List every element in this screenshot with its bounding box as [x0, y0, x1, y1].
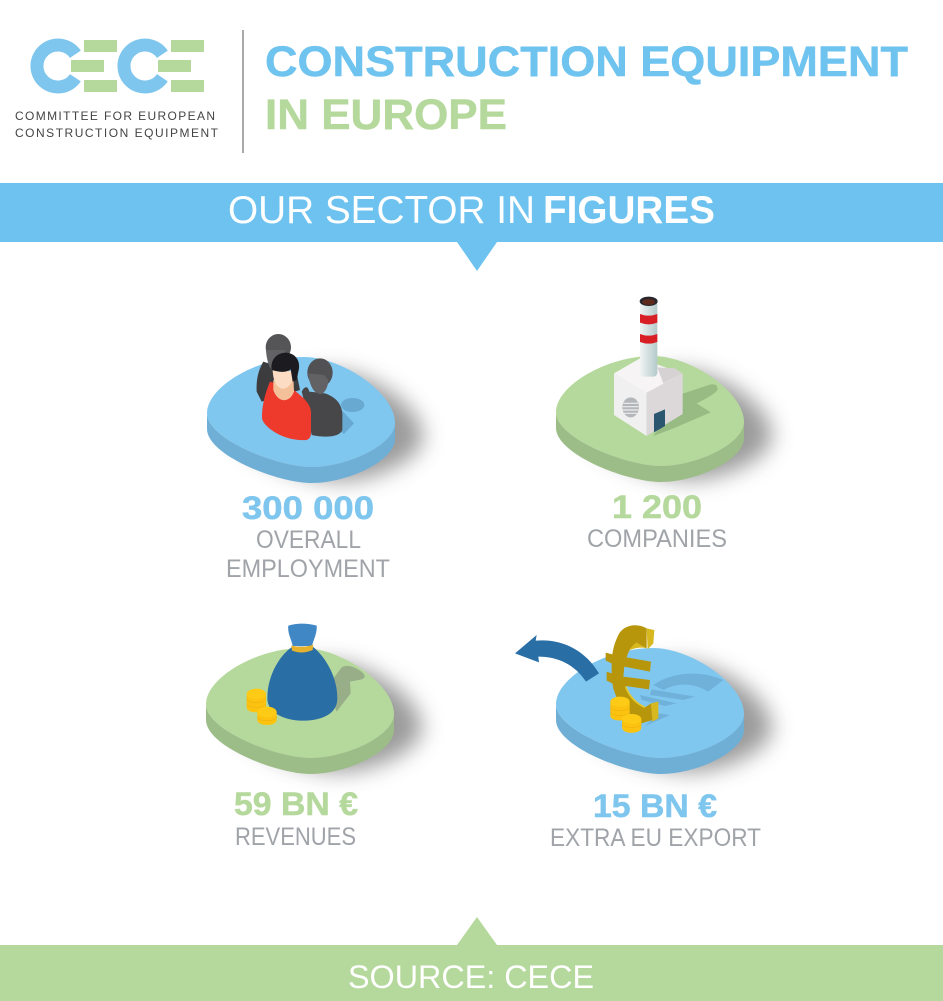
- title: IN EUROPE: [265, 91, 507, 139]
- panel: extra EU export: [515, 625, 772, 852]
- label: overall employment: OVERALL: [256, 526, 361, 554]
- label: companies: COMPANIES: [587, 525, 727, 553]
- footer: source: [0, 917, 943, 1001]
- platform: [206, 648, 422, 774]
- banner: our sector in figures: [0, 183, 943, 271]
- stat: 15 BN €: 15 BN €: [593, 788, 717, 824]
- label: overall employment: EMPLOYMENT: [226, 555, 390, 583]
- platform: [556, 356, 772, 482]
- header: CECE logo: [15, 40, 219, 140]
- icon: export arrow: [515, 635, 599, 682]
- label: extra EU export: EXTRA EU EXPORT: [550, 824, 761, 852]
- icon: factory: [614, 297, 718, 436]
- stat: 59 BN €: 59 BN €: [234, 786, 358, 822]
- icon: people: [257, 334, 364, 440]
- label: revenues: REVENUES: [235, 823, 356, 851]
- platform: [556, 648, 772, 774]
- title: [265, 38, 908, 139]
- stat: 1 200: 1 200: [612, 489, 702, 525]
- logo mark: [37, 40, 204, 92]
- panel: revenues: [206, 624, 422, 851]
- stat: 300 000: 300 000: [242, 490, 374, 526]
- panel: companies: [556, 297, 772, 553]
- platform: [207, 357, 423, 483]
- footer: source: SOURCE: CECE: [348, 959, 594, 995]
- icon: euro symbol and coins: [606, 625, 723, 733]
- logo caption: COMMITTEE FOR EUROPEAN: [15, 109, 215, 123]
- panel: overall employment: [207, 334, 423, 583]
- title: CONSTRUCTION EQUIPMENT: [265, 38, 908, 86]
- label: overall employment: [226, 526, 390, 583]
- icon: money bag and coins: [247, 624, 365, 725]
- banner: our sector in figures: FIGURES: [543, 189, 715, 232]
- banner: our sector in figures: OUR SECTOR IN: [228, 189, 535, 232]
- logo caption: [15, 109, 219, 140]
- logo caption: CONSTRUCTION EQUIPMENT: [15, 126, 219, 140]
